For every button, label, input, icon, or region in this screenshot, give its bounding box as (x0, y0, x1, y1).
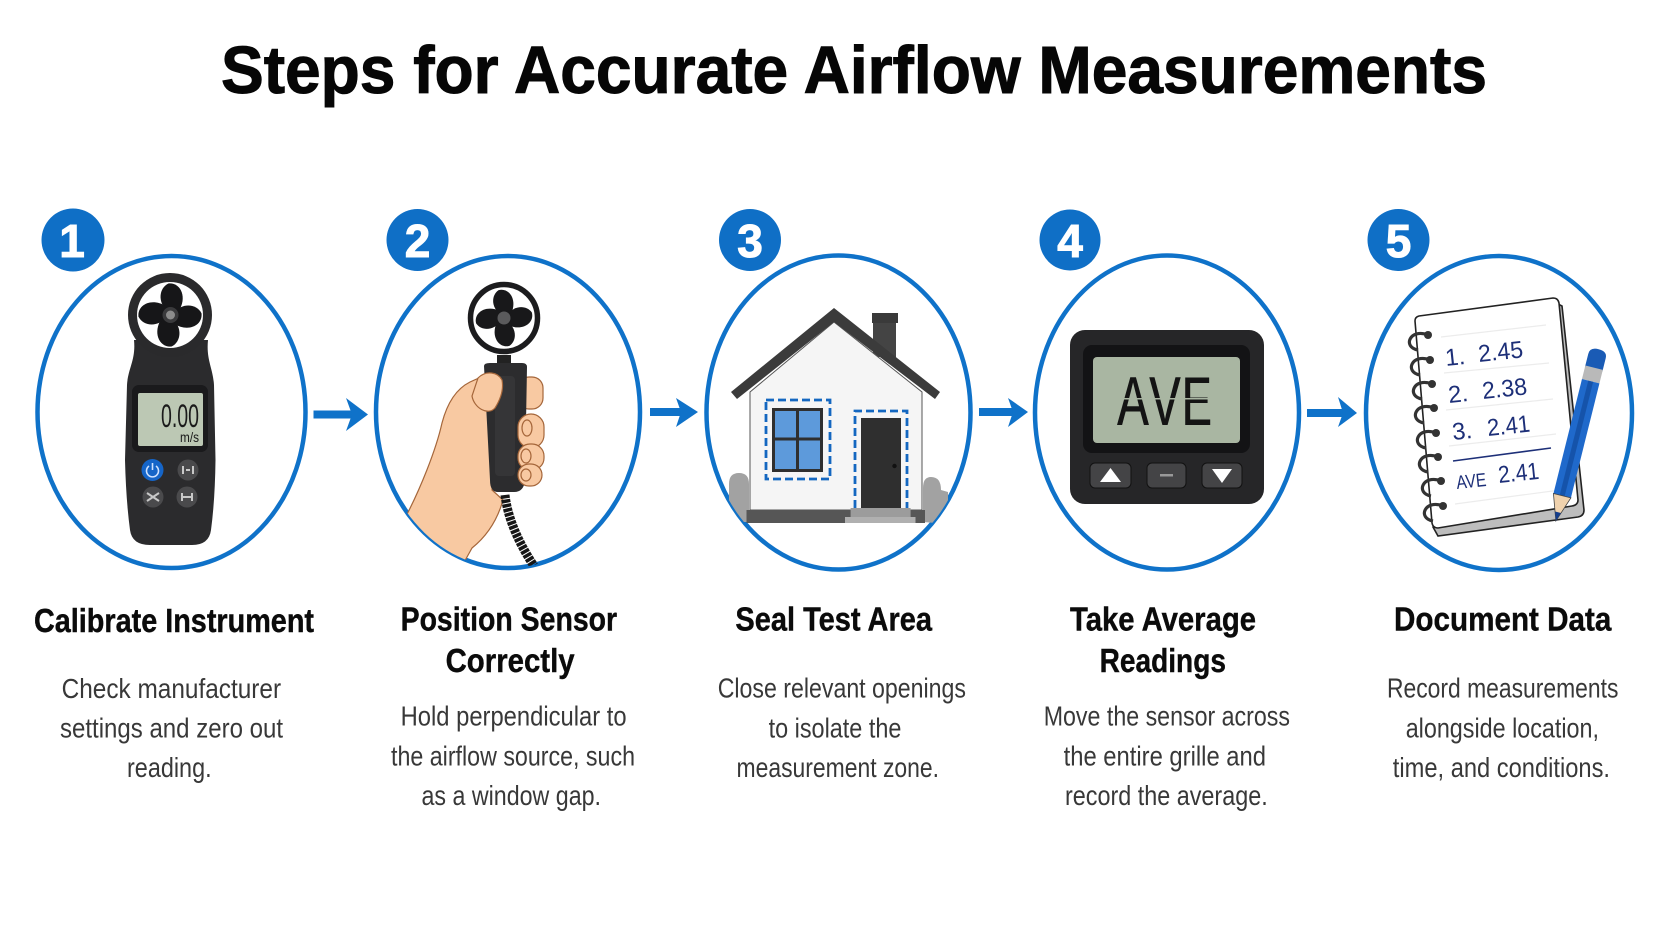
description 2 (391, 701, 635, 811)
panel: step 5 document data (1366, 209, 1632, 783)
badge 4: 4 (1057, 215, 1083, 267)
description 5: time, and conditions. (1393, 752, 1610, 783)
heading 4: Readings (1100, 642, 1226, 679)
description 4: the entire grille and (1064, 741, 1266, 772)
heading 3: Seal Test Area (735, 601, 933, 638)
description 5 (1387, 673, 1618, 783)
description 3: measurement zone. (736, 752, 939, 783)
description 4: record the average. (1065, 780, 1268, 811)
heading 2: Position Sensor (401, 601, 617, 638)
icon: digital display (1070, 330, 1264, 504)
description 5: alongside location, (1406, 713, 1599, 744)
icon: house with sealed openings (729, 308, 948, 524)
arrow 1 to 2 (314, 398, 368, 431)
description 2: as a window gap. (422, 780, 601, 811)
description 1: settings and zero out (60, 713, 283, 744)
description 3: to isolate the (769, 713, 901, 744)
heading 1: Calibrate Instrument (34, 602, 314, 639)
panel: step 1 calibrate instrument (34, 208, 314, 783)
circle frame 1 (38, 256, 306, 568)
arrow 3 to 4 (979, 398, 1028, 427)
badge 2: 2 (405, 215, 430, 267)
title: Steps for Accurate Airflow Measurements (221, 33, 1487, 108)
heading 5: Document Data (1394, 601, 1612, 638)
description 1 (60, 673, 283, 783)
description 1: Check manufacturer (62, 673, 281, 704)
badge 1: 1 (59, 215, 85, 267)
icon: digital display: AVE (1117, 365, 1213, 447)
icon: hand holding sensor (400, 284, 544, 566)
icon: spiral notebook with pencil (1409, 298, 1607, 536)
icon: spiral notebook with pencil: 2. (1447, 380, 1470, 409)
icon: spiral notebook with pencil: AVE (1455, 470, 1487, 494)
heading 4 (1070, 601, 1256, 679)
icon: spiral notebook with pencil: 2.45 (1477, 336, 1524, 368)
description 3 (718, 673, 966, 783)
badge 5 (1368, 209, 1430, 271)
arrow 4 to 5 (1307, 397, 1357, 427)
panel: step 2 position sensor (376, 209, 640, 811)
description 1: reading. (127, 752, 212, 783)
circle frame 4 (1035, 256, 1299, 570)
description 4: Move the sensor across (1044, 701, 1290, 732)
circle frame 5 (1366, 256, 1632, 570)
icon: spiral notebook with pencil: 2.41 (1486, 411, 1531, 442)
description 2: Hold perpendicular to (401, 701, 627, 732)
icon: spiral notebook with pencil: 2.41 (1497, 458, 1540, 489)
description 2: the airflow source, such (391, 741, 635, 772)
icon: handheld anemometer: 0.00 (161, 398, 199, 434)
circle frame 3 (706, 256, 970, 570)
heading 2: Correctly (446, 642, 575, 679)
panel: step 4 take average readings (1035, 210, 1299, 811)
heading 2 (401, 601, 617, 679)
icon: spiral notebook with pencil: 1. (1444, 343, 1467, 372)
description 3: Close relevant openings (718, 673, 966, 704)
badge 3: 3 (737, 215, 763, 267)
icon: handheld anemometer (125, 273, 216, 545)
icon: spiral notebook with pencil: 3. (1451, 417, 1474, 446)
badge 4 (1040, 210, 1100, 270)
badge 1 (42, 208, 104, 272)
description 4 (1044, 701, 1290, 811)
circle frame 2 (376, 256, 640, 568)
description 5: Record measurements (1387, 673, 1618, 704)
icon: spiral notebook with pencil: 2.38 (1481, 373, 1528, 405)
icon: handheld anemometer: m/s (180, 429, 199, 445)
badge 2 (386, 209, 448, 271)
badge 3 (719, 209, 781, 271)
panel: step 3 seal test area (706, 209, 970, 783)
badge 5: 5 (1386, 215, 1411, 267)
arrow 2 to 3 (650, 398, 698, 427)
heading 4: Take Average (1070, 601, 1256, 638)
